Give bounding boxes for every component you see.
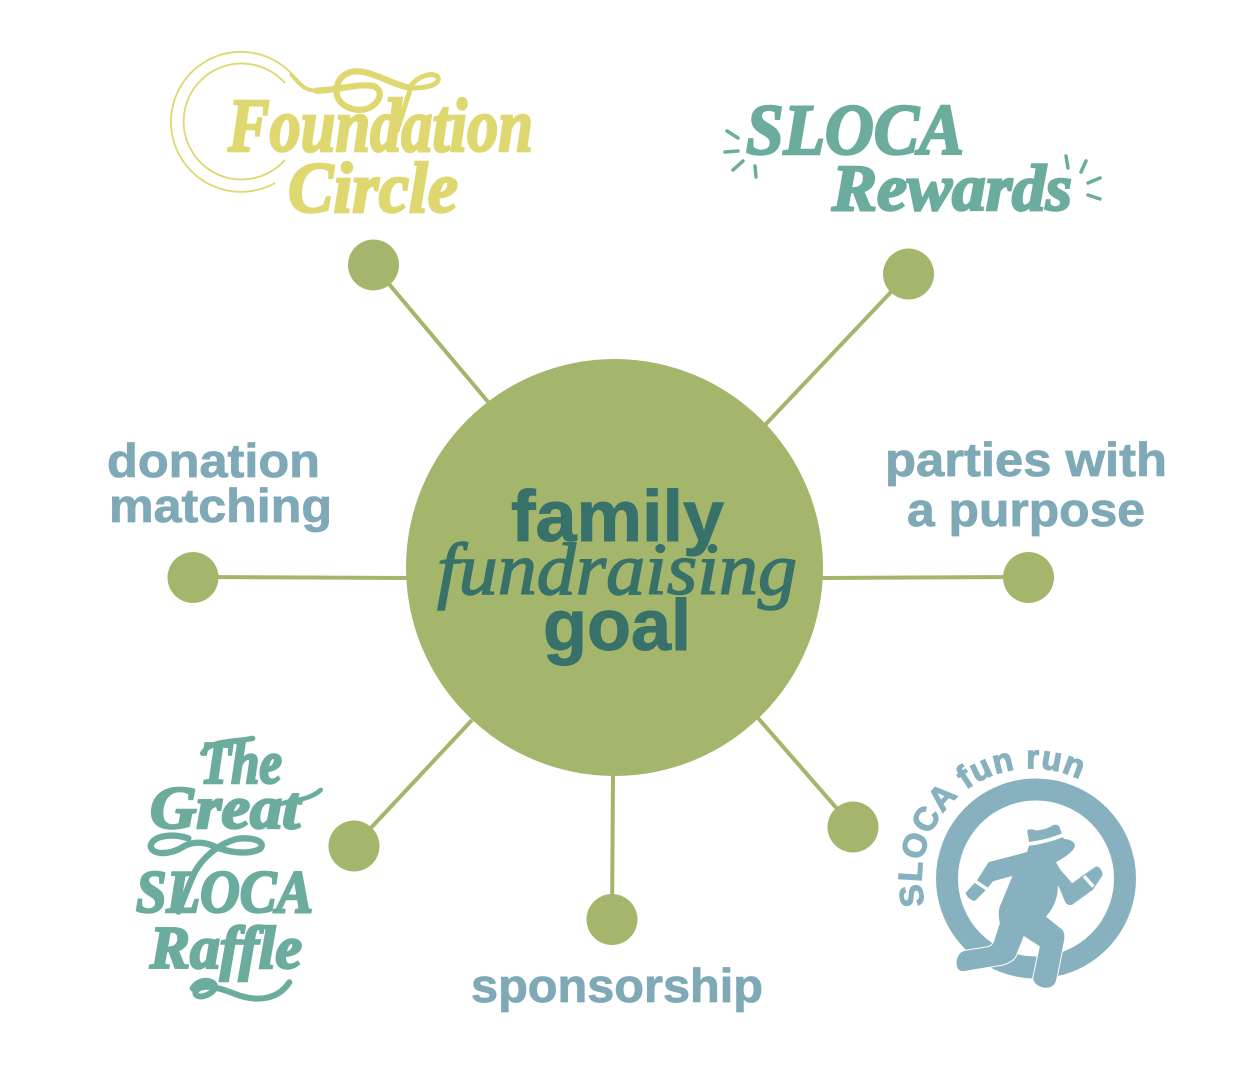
hub title: family [511, 477, 724, 557]
label: parties with a purpose: a purpose [907, 483, 1145, 536]
label: sponsorship: sponsorship [471, 959, 763, 1012]
logo: Foundation Circle [171, 52, 533, 228]
logo: Foundation Circle: Foundation [227, 84, 533, 168]
spoke lines connecting hub to nodes [193, 265, 1028, 919]
ring [947, 790, 1125, 968]
label: donation matching: matching [109, 479, 332, 532]
icon: sparkle rays [725, 131, 1100, 199]
label: parties with a purpose: parties with [885, 433, 1167, 486]
icon: running bear [956, 824, 1103, 988]
central hub circle [406, 359, 823, 776]
logo: SLOCA Rewards: SLOCA [746, 90, 964, 170]
logo: The Great SLOCA Raffle [136, 730, 321, 999]
logo: The Great SLOCA Raffle: The [200, 730, 282, 796]
logo: SLOCA fun run [898, 750, 1136, 988]
label: donation matching [107, 434, 332, 532]
logo: SLOCA fun run: SLOCA fun run [898, 750, 1084, 906]
logo: The Great SLOCA Raffle: SLOCA [136, 859, 313, 925]
hub title [437, 477, 797, 666]
logo: The Great SLOCA Raffle: Raffle [149, 915, 302, 981]
logo: The Great SLOCA Raffle: Great [150, 775, 302, 841]
logo: SLOCA Rewards [725, 90, 1100, 225]
logo: SLOCA Rewards: Rewards [831, 152, 1072, 225]
logo: Foundation Circle: Circle [288, 148, 458, 228]
label: parties with a purpose [885, 433, 1167, 536]
hub title: fundraising [437, 529, 797, 611]
node dots [168, 240, 1054, 945]
label: donation matching: donation [107, 434, 320, 487]
hub title: goal [543, 586, 691, 666]
